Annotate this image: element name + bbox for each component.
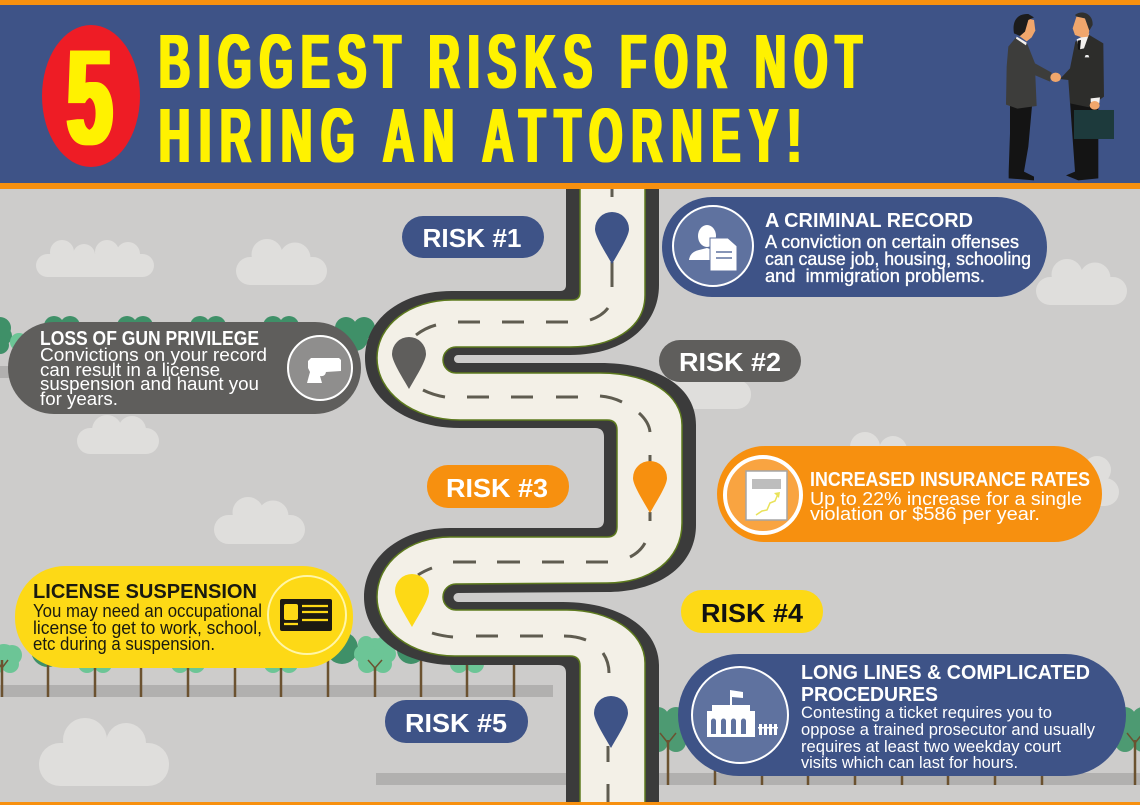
pin: risk 2 bbox=[392, 337, 426, 389]
label: risk 1 bbox=[402, 216, 544, 258]
label: risk 3: RISK #3 bbox=[446, 473, 548, 503]
upper-left trees bbox=[0, 316, 375, 354]
lower-left tree row bbox=[0, 632, 514, 697]
icon: id card bbox=[280, 599, 332, 631]
winding road bbox=[364, 185, 696, 805]
pin: risk 5 bbox=[594, 696, 628, 748]
handshake bbox=[1050, 73, 1061, 82]
body text bbox=[801, 703, 1095, 772]
panel: loss of gun privilege bbox=[8, 322, 361, 414]
label: risk 3 bbox=[427, 465, 569, 508]
label: risk 2 bbox=[659, 340, 801, 382]
heading: INCREASED INSURANCE RATES bbox=[810, 469, 1090, 491]
icon: chart document bbox=[746, 471, 787, 520]
label: risk 5 bbox=[385, 700, 528, 743]
heading: LOSS OF GUN PRIVILEGE bbox=[40, 328, 259, 350]
badge: number 5: 5 bbox=[67, 20, 112, 173]
body text: and immigration problems. bbox=[765, 266, 985, 286]
panel: long lines and complicated procedures bbox=[678, 654, 1126, 776]
body text: Convictions on your record bbox=[40, 345, 267, 365]
heading bbox=[801, 662, 1090, 706]
heading: A CRIMINAL RECORD bbox=[765, 210, 973, 232]
body text bbox=[765, 232, 1031, 286]
body text: oppose a trained prosecutor and usually bbox=[801, 720, 1095, 739]
icon: person with document bbox=[689, 225, 737, 271]
clouds bbox=[36, 239, 1127, 786]
lower-right trees bbox=[647, 707, 1140, 785]
body text: license to get to work, school, bbox=[33, 618, 262, 638]
left man bbox=[1006, 14, 1052, 180]
pin: risk 1 bbox=[595, 212, 629, 264]
pin: risk 3 bbox=[633, 461, 667, 513]
panel: license suspension bbox=[15, 566, 353, 668]
body text: You may need an occupational bbox=[33, 601, 262, 621]
title: BIGGEST RISKS FOR NOT bbox=[159, 20, 862, 105]
panel: a criminal record bbox=[662, 197, 1047, 297]
heading: LONG LINES & COMPLICATED bbox=[801, 662, 1090, 684]
body text bbox=[33, 601, 262, 654]
bottom border bbox=[0, 802, 1140, 805]
right man bbox=[1060, 12, 1114, 180]
header banner bbox=[0, 0, 1140, 189]
panel: increased insurance rates bbox=[717, 446, 1102, 542]
label: risk 5: RISK #5 bbox=[405, 708, 507, 738]
body text: Contesting a ticket requires you to bbox=[801, 703, 1052, 722]
label: risk 2: RISK #2 bbox=[679, 347, 781, 377]
body text: visits which can last for hours. bbox=[801, 753, 1018, 772]
body text: can result in a license bbox=[40, 360, 220, 380]
heading: LICENSE SUSPENSION bbox=[33, 581, 257, 603]
body text bbox=[40, 345, 267, 409]
title: HIRING AN ATTORNEY! bbox=[159, 94, 801, 179]
body text: Up to 22% increase for a single bbox=[810, 489, 1082, 509]
title bbox=[159, 20, 862, 179]
badge: number 5 bbox=[42, 20, 140, 173]
body text: suspension and haunt you bbox=[40, 374, 259, 394]
label: risk 4 bbox=[681, 590, 823, 633]
body text: for years. bbox=[40, 389, 118, 409]
body text: violation or $586 per year. bbox=[810, 504, 1040, 524]
body text: requires at least two weekday court bbox=[801, 737, 1061, 756]
body text: can cause job, housing, schooling bbox=[765, 249, 1031, 269]
label: risk 4: RISK #4 bbox=[701, 598, 804, 628]
body text bbox=[810, 489, 1082, 524]
heading: PROCEDURES bbox=[801, 684, 938, 706]
illustration: two businessmen shaking hands bbox=[1006, 12, 1114, 180]
body text: A conviction on certain offenses bbox=[765, 232, 1019, 252]
label: risk 1: RISK #1 bbox=[422, 223, 522, 253]
icon: pistol bbox=[307, 358, 341, 383]
pin: risk 4 bbox=[395, 574, 429, 627]
body text: etc during a suspension. bbox=[33, 634, 215, 654]
icon: courthouse bbox=[707, 690, 778, 737]
road strips bbox=[0, 366, 1140, 785]
